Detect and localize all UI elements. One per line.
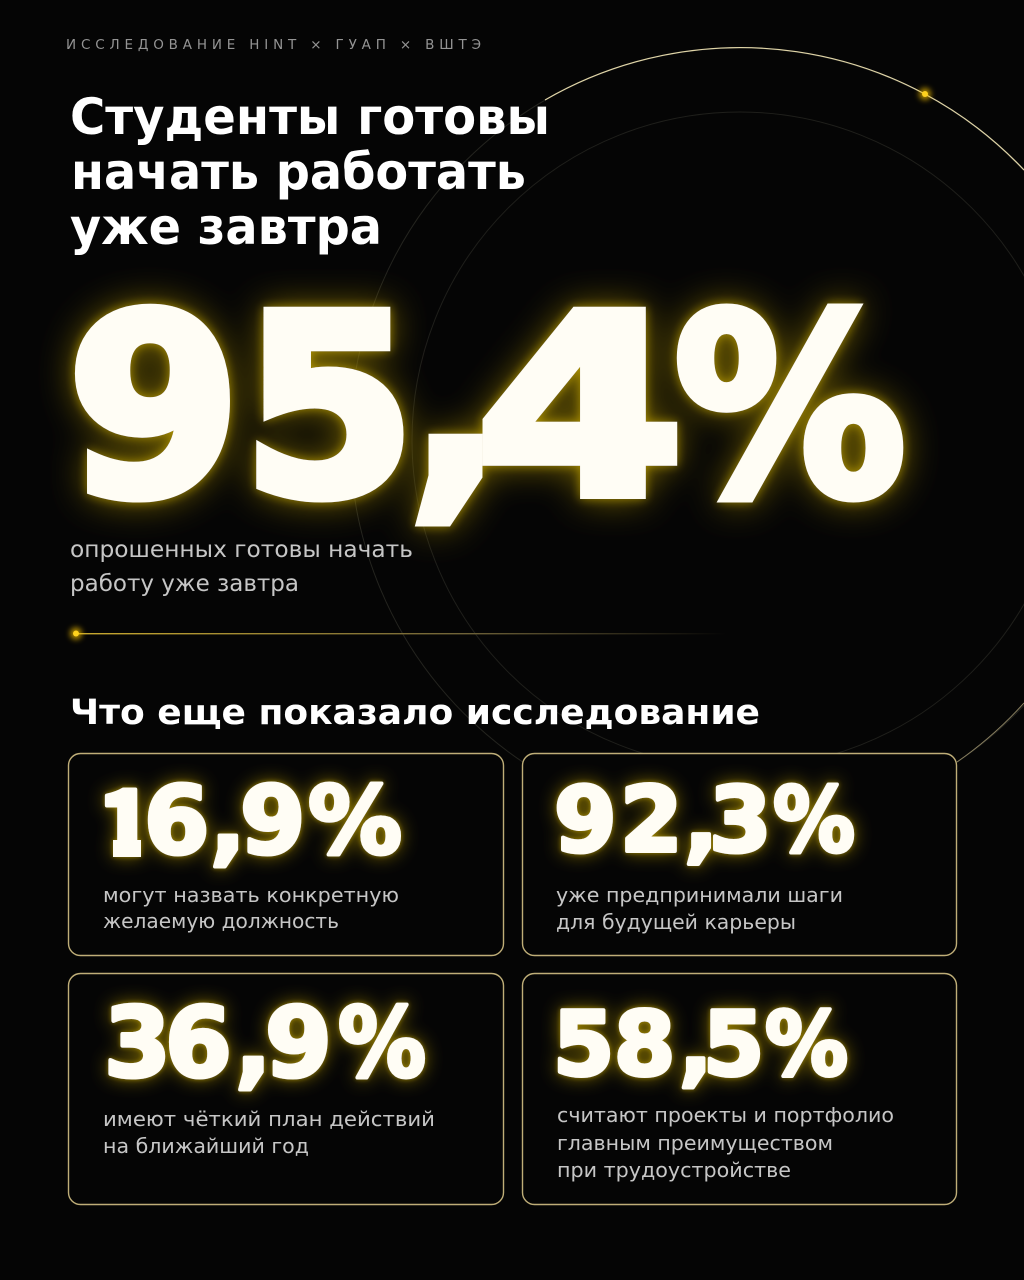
description: уже предпринимали шаги <box>556 883 843 907</box>
description: могут назвать конкретную <box>103 883 399 907</box>
panel: 36,9% <box>68 974 504 1204</box>
section heading: Что еще показало исследование <box>70 693 760 733</box>
description: на ближайший год <box>103 1134 309 1158</box>
description: считают проекты и портфолио <box>557 1103 894 1127</box>
description <box>556 883 843 934</box>
big number: 95,4%: 4 <box>475 262 685 553</box>
stat: 16,9%: % <box>308 767 402 876</box>
title: Студенты готовы <box>70 88 550 146</box>
description <box>557 1103 894 1182</box>
big number caption: работу уже завтра <box>70 571 299 597</box>
stat: 58,5%: 58,5 <box>553 993 764 1096</box>
stat: 58,5%: % <box>765 993 848 1096</box>
title <box>70 88 550 256</box>
big number caption <box>70 537 413 597</box>
eyebrow label: ИССЛЕДОВАНИЕ HINT × ГУАП × ВШТЭ <box>66 37 481 53</box>
stat: 36,9%: % <box>338 987 426 1099</box>
description: желаемую должность <box>103 909 339 933</box>
divider with dot <box>70 628 726 640</box>
panel: 58,5% <box>522 974 956 1204</box>
description <box>103 883 399 933</box>
stat: 92,3%: % <box>773 768 855 873</box>
title: начать работать <box>71 143 526 201</box>
big number: 95,4% <box>67 254 906 553</box>
big number caption: опрошенных готовы начать <box>70 537 413 563</box>
title: уже завтра <box>70 198 382 256</box>
description: для будущей карьеры <box>556 910 796 934</box>
stat: 36,9%: 36,9 <box>104 987 332 1099</box>
decorative orbit arcs <box>350 48 1024 828</box>
description: главным преимуществом <box>557 1131 833 1155</box>
stat: 16,9%: 6,9 <box>144 767 305 876</box>
stat: 92,3%: 92,3 <box>554 768 772 873</box>
description: имеют чёткий план действий <box>103 1107 435 1131</box>
description: при трудоустройстве <box>557 1158 791 1182</box>
icon: orbit dot <box>919 88 931 100</box>
big number: 95,4%: % <box>674 262 906 553</box>
panel: 92,3% <box>522 754 956 956</box>
stat: 16,9%: 1 <box>98 751 153 881</box>
description <box>103 1107 435 1158</box>
panel: 16,9% <box>68 751 504 956</box>
big number: 95,4%: 95, <box>67 254 503 553</box>
stat: 16,9% <box>95 770 412 878</box>
